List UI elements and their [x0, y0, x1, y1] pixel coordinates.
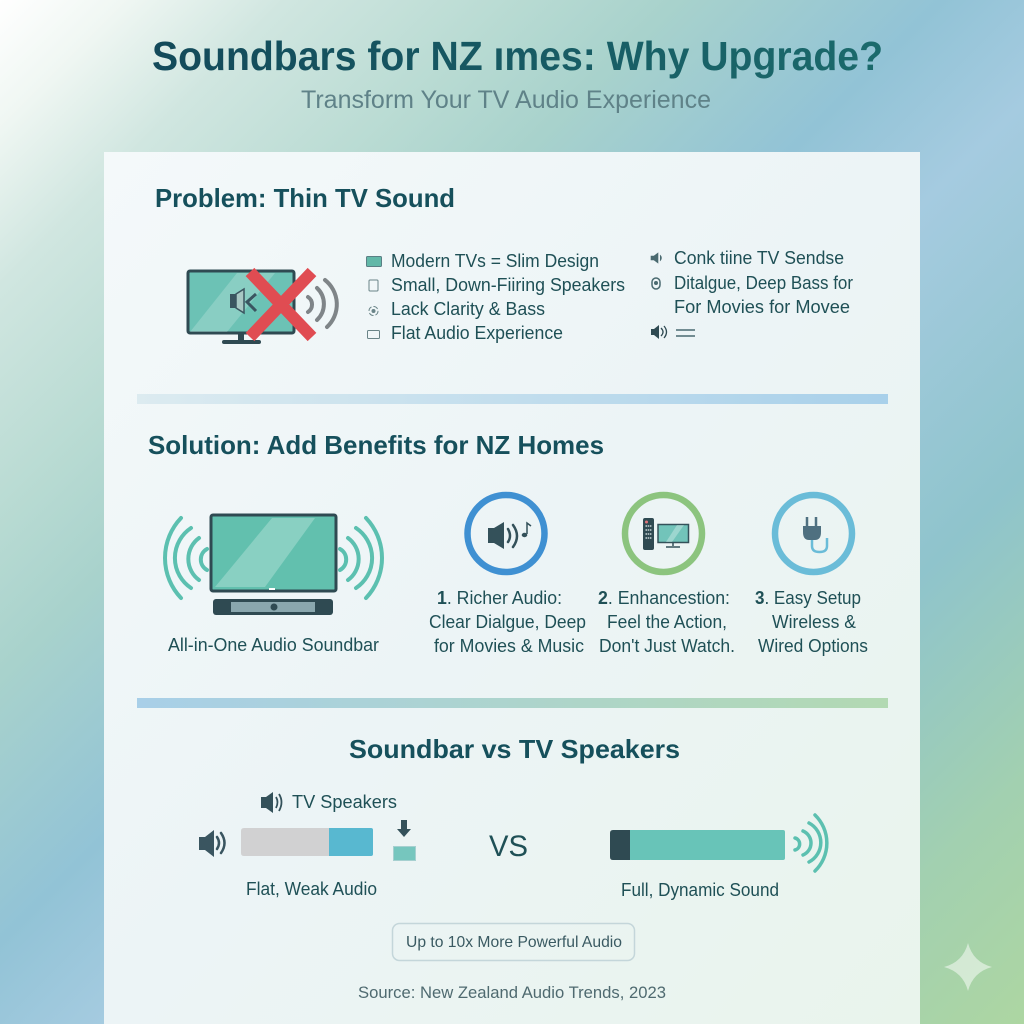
main panel	[104, 152, 920, 1024]
icon: target	[369, 306, 378, 316]
bar: TV speakers	[241, 828, 373, 856]
icon: sound waves	[795, 815, 827, 871]
icon: speaker box	[369, 280, 378, 291]
text: line one: Conk tiine TV Sendse	[674, 248, 844, 268]
icon: remote and monitor	[625, 495, 702, 572]
text: benefit 2: 2. Enhancestion:	[598, 588, 730, 608]
label: TV speakers: TV Speakers	[292, 792, 397, 812]
icon: dial	[652, 278, 660, 289]
text: slim design: Modern TVs = Slim Design	[391, 251, 599, 271]
caption: dynamic sound: Full, Dynamic Sound	[621, 880, 779, 900]
text: benefit 2: Feel the Action,	[607, 612, 727, 632]
icon: small speaker	[651, 253, 662, 263]
text: line three: For Movies for Movee	[674, 297, 850, 317]
problem list	[366, 251, 625, 343]
text: benefit 1	[429, 588, 586, 656]
text: benefit 3: 3. Easy Setup	[755, 588, 861, 608]
heading: solution: Solution: Add Benefits for NZ Homes	[148, 430, 604, 460]
text: line two: Ditalgue, Deep Bass for	[674, 273, 853, 293]
title: Soundbars for NZ ımes: Why Upgrade?	[152, 33, 883, 79]
source: Source: New Zealand Audio Trends, 2023	[358, 983, 666, 1002]
bar: soundbar	[610, 830, 785, 860]
text: benefit 1: 1. Richer Audio:	[437, 588, 562, 608]
text: benefit 2	[598, 588, 735, 656]
icon: sparkle	[944, 943, 992, 991]
icon: tv	[366, 256, 382, 266]
benefit 1: richer audio	[429, 495, 586, 656]
text: flat audio: Flat Audio Experience	[391, 323, 563, 343]
icon: speaker and note	[468, 495, 544, 572]
benefit 2: enhancement	[598, 495, 735, 656]
text: benefit 1: for Movies & Music	[434, 636, 584, 656]
icon: speaker left	[199, 830, 224, 857]
benefit 3: easy setup	[755, 495, 868, 656]
caption: soundbar: All-in-One Audio Soundbar	[168, 635, 379, 655]
icon: arrow down to tablet	[394, 820, 416, 860]
secondary list	[651, 248, 853, 339]
label: VS: VS	[489, 830, 528, 863]
icon: flat box	[368, 330, 380, 338]
icon: plug	[775, 495, 852, 572]
callout: Up to 10x More Powerful Audio	[406, 934, 622, 951]
callout	[392, 924, 634, 960]
text: benefit 3: Wired Options	[758, 636, 868, 656]
heading: problem: Problem: Thin TV Sound	[155, 183, 455, 213]
text: benefit 3	[755, 588, 868, 656]
caption: flat audio: Flat, Weak Audio	[246, 879, 377, 899]
text: benefit 2: Don't Just Watch.	[599, 636, 735, 656]
icon: muted TV with red cross	[188, 271, 337, 344]
text: benefit 3: Wireless &	[772, 612, 856, 632]
heading: comparison: Soundbar vs TV Speakers	[349, 734, 680, 764]
icon: TV with soundbar and waves	[165, 515, 382, 615]
text: clarity: Lack Clarity & Bass	[391, 299, 545, 319]
icon: speaker with equals	[651, 325, 695, 339]
text: speakers: Small, Down-Fiiring Speakers	[391, 275, 625, 295]
text: benefit 1: Clear Dialgue, Deep	[429, 612, 586, 632]
subtitle: Transform Your TV Audio Experience	[301, 86, 711, 114]
